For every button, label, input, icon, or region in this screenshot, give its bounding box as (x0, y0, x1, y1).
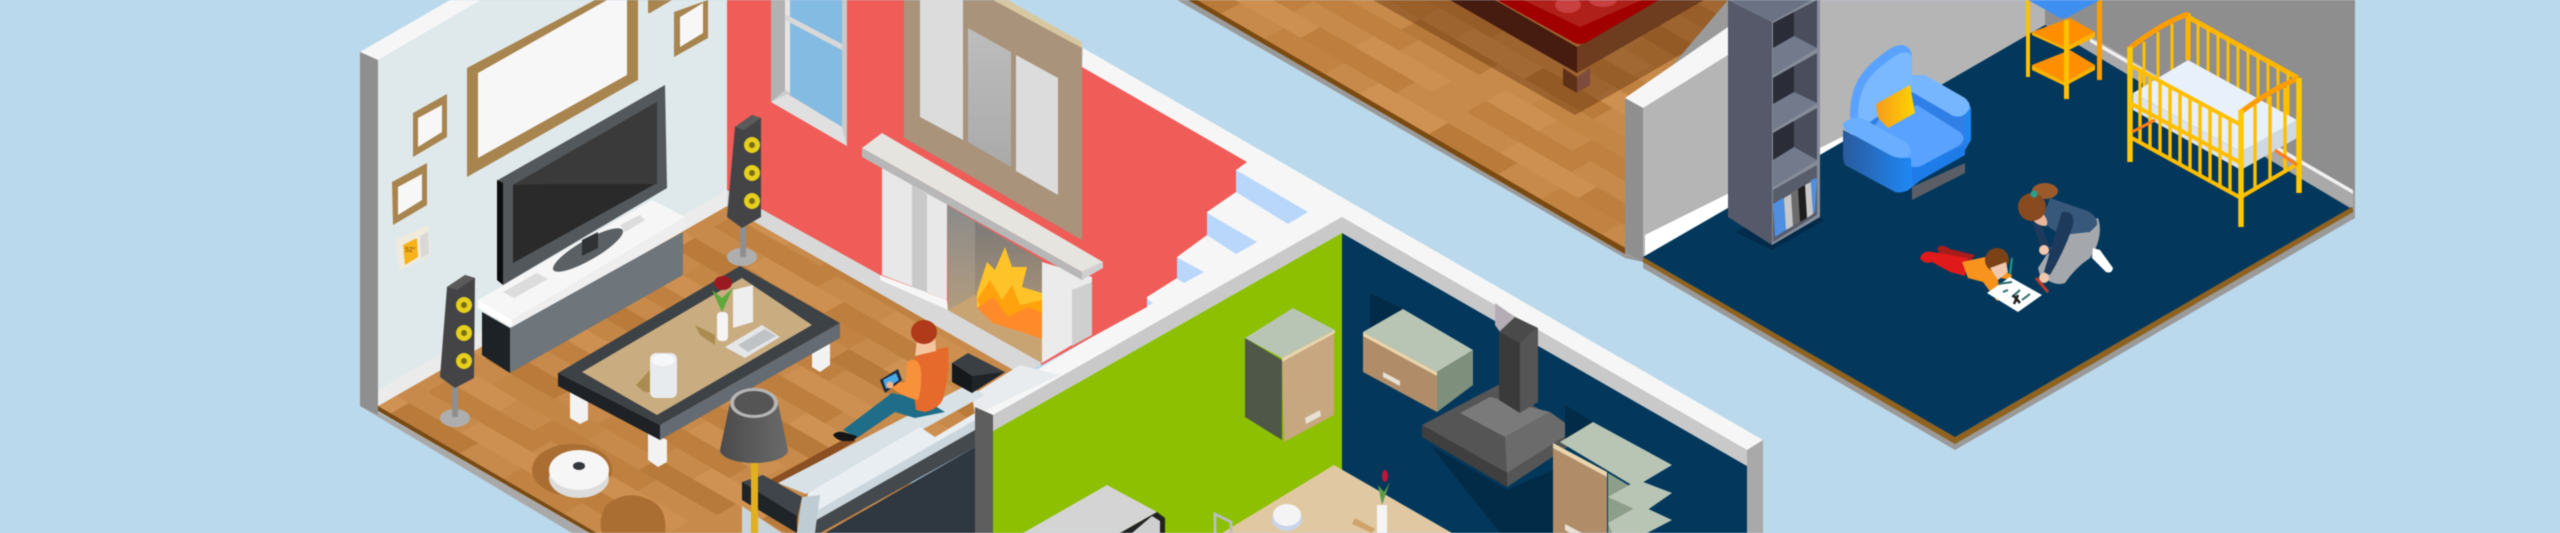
tan overmantel panel (904, 0, 1082, 240)
fireplace (862, 133, 1103, 363)
crib front rails and posts (2140, 70, 2285, 191)
crib back rails (2188, 13, 2298, 78)
TV (497, 85, 667, 285)
speaker left (440, 275, 475, 427)
sofa (742, 353, 1060, 533)
robot vacuum (532, 444, 612, 498)
red wall (727, 0, 1247, 365)
plates (1272, 507, 1302, 531)
room: living room shell (360, 0, 1030, 533)
coffee table (558, 266, 840, 467)
TV cabinet (478, 200, 685, 373)
legs (843, 393, 945, 438)
room: nursery carpet and walls (1625, 0, 2355, 450)
armchair (1843, 45, 1971, 200)
plant vase (695, 276, 733, 345)
keyboard (725, 325, 780, 358)
mantel (862, 133, 1103, 272)
woman (2018, 183, 2113, 292)
stair risers (1145, 170, 1308, 307)
sofa far arm (952, 353, 1005, 393)
cooker hood (1422, 303, 1600, 533)
changing table (2026, 0, 2102, 99)
flames (977, 247, 1042, 339)
rug patch (601, 495, 665, 533)
kitchen appliance (1023, 485, 1165, 533)
kitchen shelf cabinet (1553, 405, 1672, 533)
people: mother and child drawing (1920, 183, 2113, 312)
bed (1450, 0, 1704, 93)
binders (1773, 178, 1817, 237)
kitchen counter (1215, 465, 1452, 533)
kitchen wall cabinet (1363, 293, 1473, 412)
kitchen cabinet on green wall (1245, 308, 1335, 442)
head (915, 336, 936, 356)
floor lamp (720, 388, 788, 533)
chair (1215, 514, 1231, 533)
left wall (378, 0, 727, 406)
red wall baseboard (727, 190, 1042, 375)
fireplace columns (882, 167, 947, 300)
sofa shadow on floor (768, 436, 856, 487)
thermostat: 52° (405, 246, 416, 254)
framed pictures (392, 0, 708, 225)
tablet (880, 369, 902, 393)
crib (2130, 13, 2299, 227)
drawing paper (1987, 277, 2042, 312)
wall cap and stairs (975, 48, 1763, 450)
window (771, 0, 847, 146)
bookcase (1728, 0, 1825, 250)
mattress (2133, 60, 2297, 152)
bed shadow (1373, 0, 1728, 115)
speaker right (727, 115, 761, 266)
room: kitchen walls (975, 217, 1763, 533)
wall end cap (1625, 27, 1728, 108)
vase and flower (1352, 470, 1390, 533)
man with tablet (833, 320, 948, 441)
child (1920, 246, 2042, 312)
shelves (1773, 0, 1817, 242)
air purifier (636, 353, 677, 398)
sofa arm (742, 475, 802, 520)
torso (913, 347, 948, 412)
room: bedroom floor (1177, 0, 1728, 262)
thermostat (396, 225, 430, 270)
